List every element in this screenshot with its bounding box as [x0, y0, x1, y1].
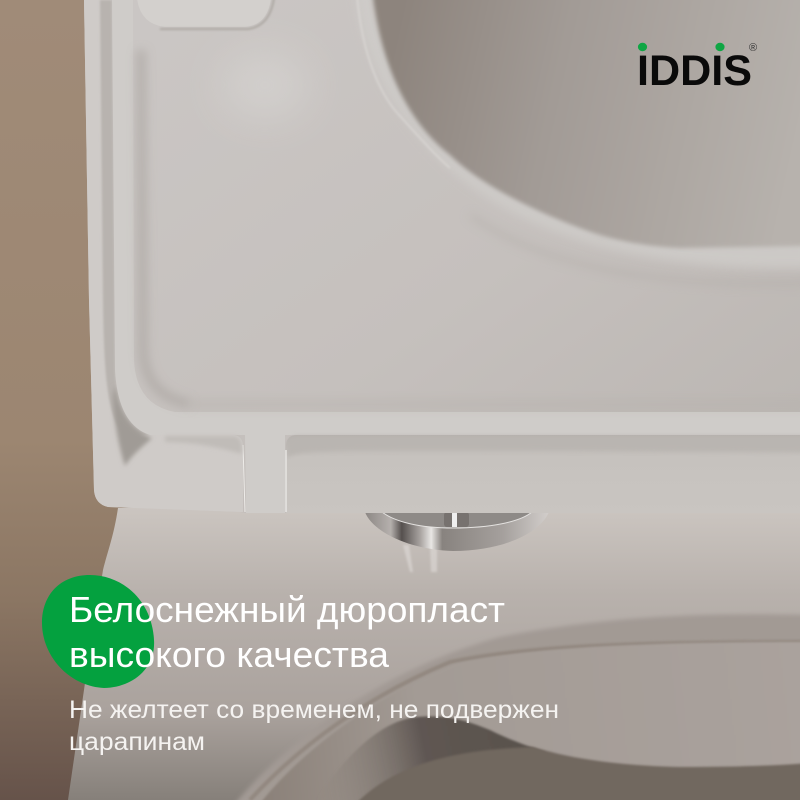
chrome hinge — [365, 512, 549, 551]
rim shadow right — [470, 215, 800, 284]
left panel surface — [84, 0, 243, 512]
side strip — [112, 0, 800, 435]
dark wedge — [310, 716, 545, 800]
heading — [69, 589, 505, 675]
subtext: царапинам — [69, 728, 205, 756]
subtext: Не желтеет со временем, не подвержен — [69, 696, 559, 724]
bowl opening — [372, 0, 800, 248]
panel top shadow — [287, 436, 800, 458]
green blob — [42, 575, 154, 688]
top left notch — [137, 0, 271, 27]
side groove — [100, 0, 150, 435]
toilet seat lid — [84, 0, 800, 513]
left panel top shadow — [165, 436, 242, 454]
rim around opening — [355, 0, 800, 268]
rear panel — [286, 435, 800, 513]
cavity bottom shadow — [190, 400, 800, 409]
left cavity shadow — [141, 50, 190, 404]
logo: IDDIS: IDDIS — [637, 47, 752, 95]
bowl interior — [350, 747, 800, 800]
subtext — [69, 696, 559, 756]
chrome reflections — [403, 545, 437, 572]
heading: высокого качества — [69, 634, 390, 675]
logo: IDDIS: ® — [749, 42, 757, 54]
middle strip — [245, 434, 285, 513]
toilet bowl — [68, 508, 800, 800]
heading: Белоснежный дюропласт — [69, 589, 505, 630]
corner shadow — [113, 385, 152, 466]
bowl rim edge — [250, 642, 800, 800]
cavity highlight — [220, 50, 310, 120]
rim ridge line — [357, 0, 450, 168]
bowl rim band — [230, 614, 800, 800]
bowl inner surface — [255, 642, 800, 800]
